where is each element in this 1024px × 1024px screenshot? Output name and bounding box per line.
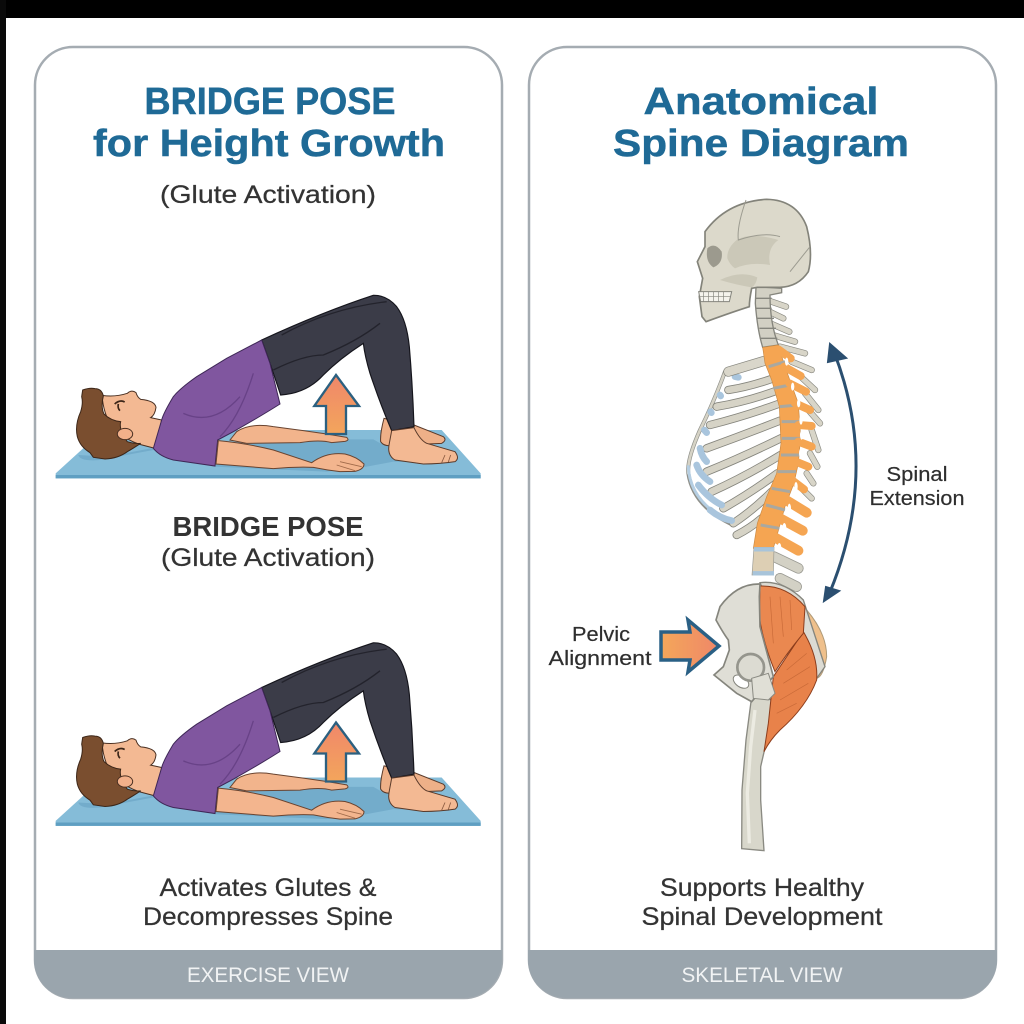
hip joint [737, 654, 764, 681]
shirt [153, 340, 280, 466]
panel: exercise view [34, 47, 502, 998]
label: spinal extension: Spinal [886, 464, 948, 486]
caption: activates glutes and decompresses spine [143, 874, 393, 931]
obturator hole [731, 672, 751, 691]
ear [117, 428, 133, 440]
greater trochanter [752, 673, 775, 700]
caption: supports healthy spinal development: Spinal Development [642, 903, 883, 931]
caption: activates glutes and decompresses spine: Decompresses Spine [143, 903, 393, 931]
caption: supports healthy spinal development [642, 874, 883, 931]
head and neck [102, 391, 162, 448]
femur [742, 697, 773, 851]
leggings [262, 295, 414, 431]
heading: bridge pose for height growth: for Height Growth [93, 123, 445, 165]
label: spinal extension: Extension [870, 488, 964, 510]
foramina [774, 358, 803, 574]
thoracic column [753, 345, 801, 548]
sacrum tan [807, 610, 827, 678]
muscle fibres [770, 597, 810, 713]
far arm [230, 425, 348, 443]
orange processes [773, 349, 812, 551]
caption: bridge pose glute activation: (Glute Activation) [161, 544, 375, 572]
label: pelvic alignment: Alignment [548, 648, 652, 670]
pelvis [714, 584, 773, 702]
footer band: skeletal view: SKELETAL VIEW [682, 964, 843, 987]
gluteus lower muscle [764, 632, 817, 752]
subtitle: glute activation: (Glute Activation) [160, 181, 376, 209]
label: pelvic alignment [548, 624, 652, 670]
heading: bridge pose for height growth [93, 81, 445, 165]
caption: activates glutes and decompresses spine: Activates Glutes & [160, 874, 377, 902]
near arm [216, 441, 364, 472]
footer band: exercise view: EXERCISE VIEW [187, 964, 349, 987]
near foot [389, 428, 457, 464]
eye [115, 401, 125, 411]
label: spinal extension [870, 464, 964, 510]
illustration: bridge pose bottom [56, 643, 481, 826]
caption: bridge pose glute activation [161, 511, 375, 572]
rib cage [688, 361, 781, 535]
heading: bridge pose for height growth: BRIDGE POSE [144, 81, 396, 123]
spinous processes [767, 300, 820, 498]
spine discs [761, 362, 801, 528]
eye socket [707, 246, 722, 267]
heading: anatomical spine diagram: Anatomical [644, 81, 878, 123]
footer band: skeletal view [528, 950, 997, 998]
illustration: bridge pose top [56, 295, 481, 478]
caption: supports healthy spinal development: Supports Healthy [660, 874, 865, 902]
arrow: pelvic alignment [661, 620, 719, 672]
arrow: spinal extension [824, 344, 856, 601]
footer band: exercise view [34, 950, 502, 998]
skull [697, 199, 810, 322]
heading: anatomical spine diagram: Spine Diagram [613, 123, 909, 165]
heading: anatomical spine diagram [613, 81, 909, 165]
cervical vertebrae [755, 287, 782, 347]
teeth [699, 292, 732, 302]
yoga mat [56, 430, 481, 478]
gluteus upper muscle [759, 586, 805, 672]
lift arrow [314, 375, 359, 434]
illustration: skeleton upper body [688, 199, 820, 587]
illustration: pelvis, glute and femur [714, 582, 827, 851]
lumbar base [774, 557, 798, 587]
far foot [381, 418, 445, 446]
caption: bridge pose glute activation: BRIDGE POSE [172, 511, 364, 542]
label: pelvic alignment: Pelvic [572, 624, 630, 646]
hair [77, 388, 141, 459]
panel: skeletal view [528, 47, 997, 998]
